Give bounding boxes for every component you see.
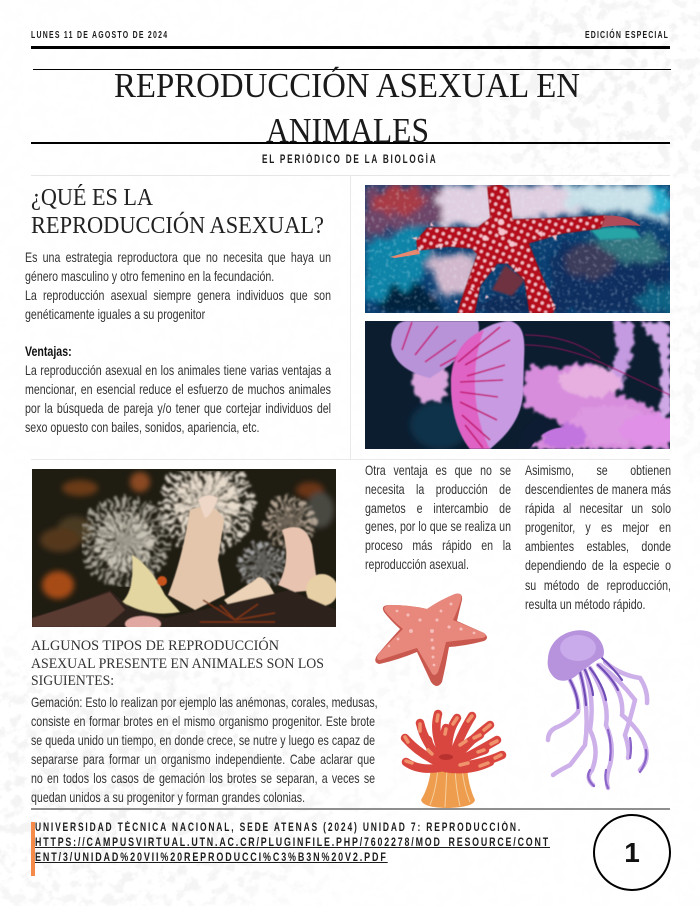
- text column: other advantage: Otra ventaja es que no se: [365, 463, 511, 478]
- text block: budding: consiste en formar brotes en el mismo organismo progenitor. Este brote: [31, 714, 375, 729]
- text block: advantages: por la búsqueda de pareja y/o tener que cortejar individuos del: [25, 401, 331, 416]
- title: [114, 65, 580, 150]
- heading: types of asexual reproduction: [31, 637, 324, 689]
- text block: definition: [25, 250, 331, 322]
- masthead date: LUNES 11 DE AGOSTO DE 2024: [31, 29, 168, 41]
- text column: faster offspring: [525, 463, 671, 612]
- text block: definition: La reproducción asexual siempre genera individuos que son: [25, 288, 331, 303]
- citation: UNIVERSIDAD TÉCNICA NACIONAL, SEDE ATENAS (2024) UNIDAD 7: REPRODUCCIÓN.: [35, 822, 522, 834]
- heading: types of asexual reproduction: ALGUNOS TIPOS DE REPRODUCCIÓN: [31, 637, 279, 654]
- text column: other advantage: proceso más rápido en la: [365, 538, 511, 553]
- text block: advantages: Ventajas:: [25, 344, 72, 359]
- text column: faster offspring: resulta un método rápido.: [525, 597, 645, 612]
- text column: faster offspring: ambientes estables, donde: [525, 539, 671, 554]
- text column: faster offspring: Asimismo, se obtienen: [525, 463, 671, 478]
- text block: definition: Es una estrategia reproductora que no necesita que haya un: [25, 250, 331, 265]
- photo: red starfish on reef: [365, 185, 670, 313]
- text column: other advantage: gametos e intercambio de: [365, 501, 511, 516]
- masthead edition label: EDICIÓN ESPECIAL: [585, 29, 669, 41]
- text column: other advantage: genes, por lo que se realiza un: [365, 519, 511, 534]
- text block: advantages: [25, 344, 332, 435]
- text block: budding: se queda unido un tiempo, en donde crece, se nutre y luego es capaz de: [31, 733, 375, 748]
- title: ANIMALES: [266, 111, 429, 150]
- text block: budding: [31, 695, 378, 805]
- citation: [35, 821, 550, 864]
- page number badge: 1: [624, 837, 640, 868]
- illustration: sea anemone: [400, 710, 506, 808]
- text block: advantages: sexo opuesto con bailes, sonidos, apariencia, etc.: [25, 420, 259, 435]
- accent bar: [31, 822, 35, 876]
- heading: what is asexual reproduction: ¿QUÉ ES LA: [31, 185, 154, 211]
- text column: faster offspring: rápida al necesitar un solo: [525, 501, 671, 516]
- text column: faster offspring: descendientes de manera más: [525, 482, 671, 497]
- text column: other advantage: [365, 463, 512, 572]
- text block: budding: separarse para formar un organismo independiente. Cabe aclarar que: [31, 752, 375, 767]
- text column: other advantage: necesita la producción de: [365, 482, 511, 497]
- page number badge: [593, 814, 671, 891]
- title: REPRODUCCIÓN ASEXUAL EN: [114, 65, 580, 105]
- illustration: jellyfish: [546, 630, 650, 790]
- text column: faster offspring: su método de reproducción,: [525, 578, 671, 593]
- subtitle: EL PERIÓDICO DE LA BIOLOGÍA: [262, 154, 437, 166]
- photo: purple jellyfish: [365, 321, 670, 449]
- heading: what is asexual reproduction: REPRODUCCIÓN ASEXUAL?: [31, 212, 324, 239]
- citation: HTTPS://CAMPUSVIRTUAL.UTN.AC.CR/PLUGINFILE.PHP/7602278/MOD_RESOURCE/CONT: [35, 837, 550, 849]
- text block: advantages: La reproducción asexual en los animales tiene varias ventajas a: [25, 363, 331, 378]
- text block: definition: género masculino y otro femenino en la fecundación.: [25, 269, 274, 284]
- text block: definition: genéticamente iguales a su progenitor: [25, 307, 205, 322]
- heading: what is asexual reproduction: [31, 184, 324, 239]
- text column: faster offspring: dependiendo de la especie o: [525, 558, 671, 573]
- text block: budding: no en todos los casos de gemación los brotes se separan, a veces se: [31, 771, 375, 786]
- heading: types of asexual reproduction: SIGUIENTES:: [31, 673, 114, 689]
- citation: ENT/3/UNIDAD%20VII%20REPRODUCCI%C3%B3N%20V2.PDF: [35, 852, 388, 864]
- text column: faster offspring: progenitor, y es mejor en: [525, 520, 671, 535]
- photo: sea anemones: [32, 469, 336, 627]
- illustration: starfish: [375, 594, 487, 686]
- heading: types of asexual reproduction: ASEXUAL PRESENTE EN ANIMALES SON LOS: [31, 656, 324, 672]
- text block: budding: Gemación: Esto lo realizan por ejemplo las anémonas, corales, medusas,: [31, 695, 378, 710]
- text block: budding: quedan unidos a su progenitor y forman grandes colonias.: [31, 790, 305, 805]
- text block: advantages: mencionar, en esencial reduce el esfuerzo de muchos animales: [25, 382, 331, 397]
- text column: other advantage: reproducción asexual.: [365, 557, 469, 572]
